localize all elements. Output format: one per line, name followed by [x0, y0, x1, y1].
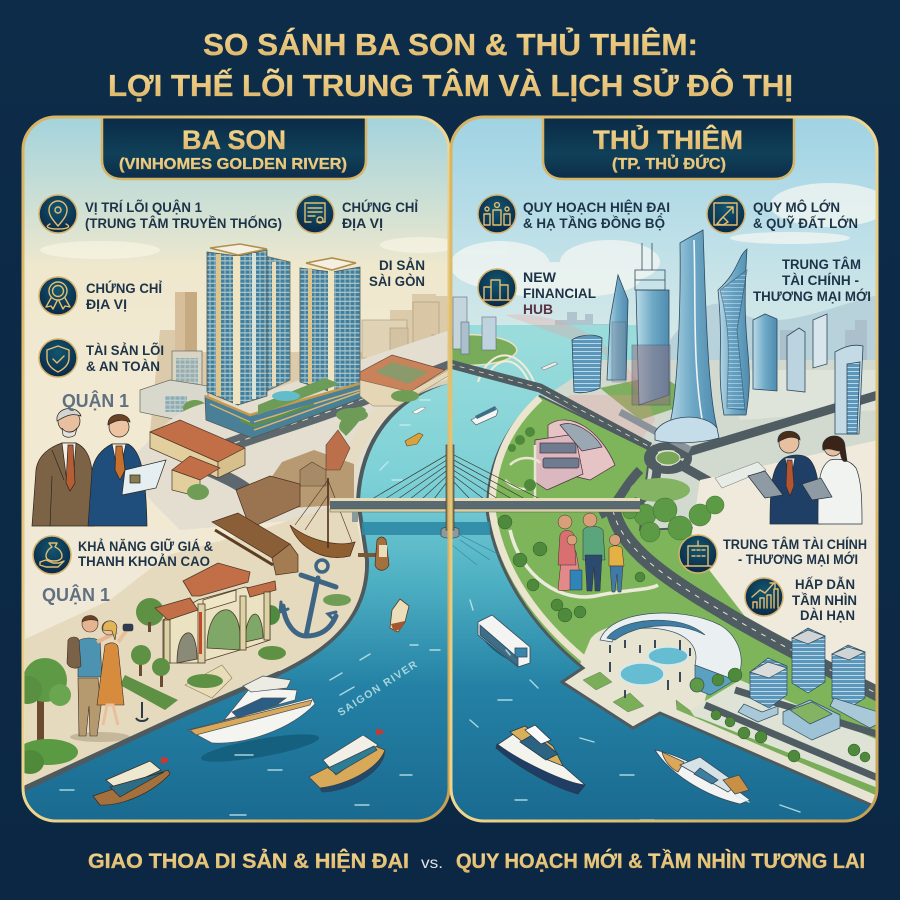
badge: office	[679, 535, 717, 573]
curved landmark building	[600, 613, 741, 695]
fountains	[620, 647, 688, 685]
label: status	[86, 281, 162, 312]
label: new financial hub: NEW	[523, 270, 556, 285]
header tab: Ba Son	[102, 117, 366, 179]
label: district 1 upper: QUẬN 1	[62, 390, 129, 411]
small boats upper river	[405, 407, 426, 446]
label: certificate	[342, 200, 418, 231]
heritage sepia quarter	[264, 407, 368, 508]
title: SO SÁNH BA SON & THỦ THIÊM:	[203, 26, 698, 62]
ground with roads	[130, 330, 450, 530]
lower river highlights	[470, 600, 800, 820]
footer tagline	[88, 849, 865, 873]
ferry right	[309, 729, 385, 792]
label: core asset: & AN TOÀN	[86, 359, 160, 374]
label: status: CHỨNG CHỈ	[86, 281, 162, 296]
tourists couple	[67, 615, 133, 742]
label: location: VỊ TRÍ LÕI QUẬN 1	[85, 200, 202, 215]
label: Saigon heritage: DI SẢN	[379, 258, 425, 273]
pier and small boat	[358, 537, 389, 570]
gardens behind gate	[136, 598, 286, 660]
label: Saigon heritage	[369, 258, 425, 289]
crowd	[610, 640, 690, 698]
park path	[510, 530, 658, 597]
label: long term vision: HẤP DẪN	[795, 577, 855, 592]
label: core asset: TÀI SẢN LÕI	[86, 343, 164, 358]
gardens in front	[120, 645, 232, 710]
plot by road	[715, 462, 766, 488]
label: financial centre lower	[723, 537, 867, 567]
trees by road	[623, 496, 724, 542]
bus boat	[474, 615, 536, 671]
lower river	[450, 510, 878, 830]
label: status: ĐỊA VỊ	[86, 297, 127, 312]
tower complex: Vinhomes Golden River	[205, 244, 368, 438]
right bank land and park	[487, 396, 878, 830]
badge: certificate	[296, 195, 334, 233]
waterfront trees	[711, 668, 870, 762]
badge: shield	[39, 339, 77, 377]
upper river	[450, 325, 650, 525]
roundabout centre	[656, 451, 680, 465]
label: financial centre lower: TRUNG TÂM TÀI CHÍNH	[723, 537, 867, 552]
bridge left half	[330, 453, 450, 535]
label: large scale: & QUỸ ĐẤT LỚN	[753, 216, 858, 231]
heritage gate	[155, 563, 276, 663]
trees near convention	[508, 427, 536, 491]
sailing ship	[290, 478, 355, 558]
old shipyard shed	[212, 476, 300, 575]
left mid buildings	[140, 351, 208, 420]
hills	[670, 295, 878, 400]
badge: city	[478, 269, 516, 307]
badge: money bag	[33, 536, 71, 574]
label: modern planning: & HẠ TẦNG ĐỒNG BỘ	[523, 216, 665, 231]
plaza	[562, 621, 720, 728]
river name: SAIGON RIVER	[336, 659, 420, 719]
business people	[748, 431, 862, 524]
yacht lower	[496, 725, 585, 794]
park trees	[498, 515, 645, 622]
label: long term vision	[792, 577, 857, 623]
label: financial centre lower: - THƯƠNG MẠI MỚI	[738, 552, 858, 567]
bridge cable reflection	[452, 535, 500, 565]
green island and towers	[450, 297, 517, 365]
badge: growth chart	[745, 578, 783, 616]
family	[558, 513, 624, 592]
label: Saigon heritage: SÀI GÒN	[369, 274, 425, 289]
yacht right	[655, 750, 750, 804]
label: long term vision: TẦM NHÌN	[792, 593, 857, 608]
label: modern planning	[523, 200, 670, 231]
label: location: (TRUNG TÂM TRUYỀN THỐNG)	[85, 216, 282, 231]
anchor	[280, 560, 336, 636]
clouds	[450, 183, 890, 298]
header tab: Thu Thiem: (TP. THỦ ĐỨC)	[612, 154, 726, 173]
label: new financial hub: HUB	[523, 302, 553, 317]
bottom wooden boat	[93, 757, 170, 805]
garden paths	[505, 445, 540, 510]
blue buildings	[738, 628, 878, 740]
footer tagline: vs.	[421, 855, 443, 872]
label: liquidity	[78, 539, 213, 569]
quay land	[25, 500, 365, 786]
small boats upper river	[471, 362, 558, 425]
panel: Ba Son	[14, 116, 468, 822]
pale land lower right	[690, 440, 878, 690]
label: location	[85, 200, 282, 231]
label: certificate: CHỨNG CHỈ	[342, 200, 418, 215]
label: financial centre upper: TÀI CHÍNH -	[782, 273, 859, 288]
badge: people	[478, 195, 516, 233]
river highlights	[60, 400, 440, 815]
skyline: old city	[150, 292, 468, 432]
label: liquidity: THANH KHOẢN CAO	[78, 554, 210, 569]
label: long term vision: DÀI HẠN	[800, 608, 855, 623]
header tab: Thu Thiem	[543, 117, 794, 179]
label: financial centre upper: TRUNG TÂM	[782, 257, 861, 272]
river	[23, 381, 450, 822]
distant skyline	[555, 310, 867, 370]
label: core asset	[86, 343, 164, 374]
embankment stroke	[25, 673, 280, 788]
gold frames	[23, 117, 877, 821]
footer tagline: GIAO THOA DI SẢN & HIỆN ĐẠI	[88, 849, 409, 873]
header tab: Thu Thiem: THỦ THIÊM	[593, 123, 743, 155]
park road	[613, 510, 880, 695]
badge: medal	[39, 277, 77, 315]
towers cluster	[572, 230, 863, 443]
header tab: Ba Son: (VINHOMES GOLDEN RIVER)	[119, 156, 347, 173]
label: financial centre upper: THƯƠNG MẠI MỚI	[753, 289, 871, 304]
label: modern planning: QUY HOẠCH HIỆN ĐẠI	[523, 200, 670, 215]
docks green insets	[583, 672, 700, 726]
label: new financial hub: FINANCIAL	[523, 286, 596, 301]
lower right grounds	[690, 680, 878, 808]
label: district 1 lower: QUẬN 1	[42, 584, 110, 605]
mini anchor	[136, 702, 148, 721]
label: certificate: ĐỊA VỊ	[342, 216, 383, 231]
footer tagline: QUY HOẠCH MỚI & TẦM NHÌN TƯƠNG LAI	[456, 849, 865, 873]
label: new financial hub	[523, 270, 596, 317]
shrub beside anchor	[323, 594, 351, 606]
label: liquidity: KHẢ NĂNG GIỮ GIÁ &	[78, 539, 213, 554]
label: large scale: QUY MÔ LỚN	[753, 200, 840, 215]
label: large scale	[753, 200, 858, 231]
badge: location	[39, 195, 77, 233]
businessmen	[32, 409, 166, 526]
arch road bridge	[450, 355, 650, 447]
left tree	[24, 658, 78, 774]
ground of financial district	[540, 360, 878, 530]
bridge pylon	[441, 445, 459, 538]
label: financial centre upper	[753, 257, 871, 304]
roundabout and roads	[600, 395, 878, 515]
pink haze	[505, 314, 655, 520]
boat mid river	[390, 599, 409, 632]
panel: Thu Thiem	[450, 116, 890, 830]
convention centre	[535, 420, 615, 490]
colonial block, right	[360, 355, 448, 406]
waterfront promenade	[345, 369, 448, 476]
title	[108, 26, 793, 103]
header tab: Ba Son: BA SON	[182, 125, 286, 155]
red-roof colonial buildings	[150, 420, 245, 500]
badge: land scale	[707, 195, 745, 233]
title: LỢI THẾ LÕI TRUNG TÂM VÀ LỊCH SỬ ĐÔ THỊ	[108, 67, 793, 103]
bridge right half	[450, 453, 640, 535]
yacht	[188, 676, 321, 767]
